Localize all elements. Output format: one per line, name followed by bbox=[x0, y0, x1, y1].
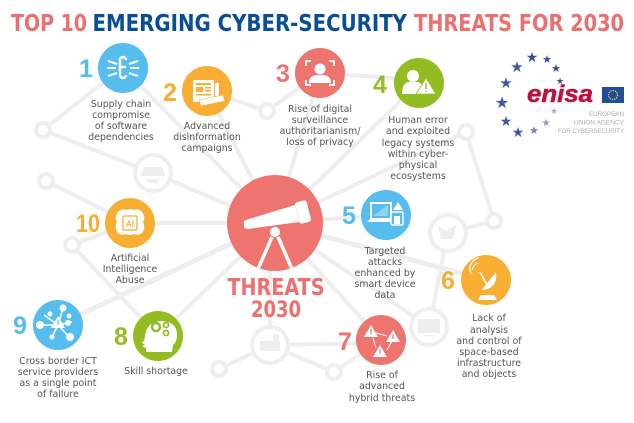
threat 4: human error: Human error bbox=[388, 115, 448, 126]
EU stars: ★ bbox=[495, 93, 509, 112]
EU stars: ★ bbox=[526, 50, 538, 66]
threat 10: AI abuse: Intelligence bbox=[103, 264, 157, 275]
threat 9: cross border bbox=[13, 300, 98, 400]
threat 3: surveillance: authoritarianism/ bbox=[280, 126, 361, 137]
threat 5: smart devices bbox=[342, 190, 416, 301]
threat 3: surveillance: surveillance bbox=[292, 115, 348, 126]
threat 10: AI abuse: Artificial bbox=[111, 253, 149, 264]
threat 9: cross border: service providers bbox=[18, 367, 98, 378]
threat 5: smart devices: Targeted bbox=[364, 246, 405, 257]
title: EMERGING CYBER-SECURITY bbox=[92, 11, 407, 37]
central label bbox=[228, 275, 324, 323]
threat 3: surveillance: loss of privacy bbox=[286, 137, 354, 148]
EU stars: ★ bbox=[556, 77, 564, 87]
threat 10: AI abuse: Abuse bbox=[116, 275, 145, 286]
EU stars: ★ bbox=[512, 125, 524, 141]
ENISA logo: EUROPEAN bbox=[589, 111, 624, 118]
threat 2: disinformation: campaigns bbox=[181, 143, 233, 154]
threat 6: satellite bbox=[441, 255, 522, 380]
threat 1: supply chain: dependencies bbox=[88, 132, 154, 143]
central label: 2030 bbox=[251, 298, 301, 323]
EU stars: ★ bbox=[500, 114, 512, 130]
threat 6: satellite: Lack of bbox=[472, 313, 506, 324]
threat 7: hybrid threats: advanced bbox=[359, 381, 405, 392]
ENISA logo: enisa bbox=[527, 81, 593, 108]
threat 4: human error bbox=[373, 58, 454, 182]
threat 6: satellite: analysis bbox=[470, 325, 508, 336]
threat 2: disinformation: disinformation bbox=[173, 132, 241, 143]
EU stars: ★ bbox=[550, 107, 558, 117]
threat 3: surveillance bbox=[276, 48, 361, 148]
threat 3: surveillance: 3 bbox=[276, 60, 290, 88]
threat 4: human error: physical bbox=[399, 160, 437, 171]
threat 4: human error: legacy systems bbox=[382, 138, 454, 149]
threat 1: supply chain: 1 bbox=[79, 55, 93, 83]
ENISA logo bbox=[495, 50, 625, 141]
EU stars: ★ bbox=[499, 74, 513, 92]
threat 1: supply chain: compromise bbox=[92, 110, 150, 121]
title: TOP 10 bbox=[11, 11, 87, 37]
EU stars: ★ bbox=[542, 53, 552, 66]
threat 5: smart devices: data bbox=[374, 290, 396, 301]
threat 6: satellite: infrastructure bbox=[457, 358, 521, 369]
threat 7: hybrid threats: 7 bbox=[338, 328, 352, 356]
background network bbox=[36, 68, 501, 379]
threat 5: smart devices: 5 bbox=[342, 202, 356, 230]
EU stars: ★ bbox=[551, 62, 561, 75]
central label: THREATS bbox=[228, 275, 324, 301]
EU stars: ★ bbox=[542, 118, 551, 129]
threat 1: supply chain: Supply chain bbox=[91, 99, 151, 110]
threat 5: smart devices: smart device bbox=[354, 279, 416, 290]
ENISA logo: FOR CYBERSECURITY bbox=[558, 128, 625, 135]
threat 3: surveillance: Rise of digital bbox=[288, 104, 352, 115]
threat 7: hybrid threats: Rise of bbox=[366, 370, 399, 381]
threat 8: skill shortage: 8 bbox=[114, 323, 128, 351]
threat 2: disinformation bbox=[163, 66, 241, 154]
threat 8: skill shortage: Skill shortage bbox=[124, 366, 188, 377]
EU stars: ★ bbox=[529, 124, 539, 137]
threat 7: hybrid threats: hybrid threats bbox=[349, 393, 415, 404]
central circle with telescope bbox=[227, 175, 323, 271]
threat 2: disinformation: Advanced bbox=[184, 121, 230, 132]
EU stars: ★ bbox=[510, 58, 524, 76]
threat 9: cross border: of failure bbox=[37, 389, 79, 400]
threat 4: human error: ecosystems bbox=[390, 171, 446, 182]
threat 5: smart devices: enhanced by bbox=[355, 268, 416, 279]
threat 4: human error: within cyber- bbox=[388, 149, 448, 160]
threat 10: AI abuse: 10 bbox=[76, 210, 100, 238]
threat 6: satellite: and control of bbox=[456, 336, 522, 347]
threat 6: satellite: space-based bbox=[459, 347, 519, 358]
threat 5: smart devices: attacks bbox=[368, 257, 402, 268]
threat 4: human error: and exploited bbox=[386, 126, 450, 137]
threat 9: cross border: Cross border ICT bbox=[19, 356, 97, 367]
faded node icons bbox=[141, 167, 456, 351]
threat 10: AI abuse: AI bbox=[126, 220, 134, 228]
threat 8: skill shortage bbox=[114, 311, 188, 377]
threat 2: disinformation: 2 bbox=[163, 79, 177, 107]
EU stars bbox=[495, 50, 564, 141]
threat 1: supply chain: of software bbox=[95, 121, 147, 132]
threat 7: hybrid threats bbox=[338, 315, 415, 404]
threat 9: cross border: 9 bbox=[13, 312, 27, 340]
threat 6: satellite: 6 bbox=[441, 267, 455, 295]
threat 1: supply chain bbox=[79, 43, 154, 143]
threat 9: cross border: as a single point bbox=[20, 378, 97, 389]
ENISA logo: UNION AGENCY bbox=[574, 120, 625, 126]
threat 10: AI abuse bbox=[76, 198, 157, 286]
title bbox=[11, 11, 624, 37]
threat 4: human error: 4 bbox=[373, 71, 387, 99]
threat 6: satellite: and objects bbox=[462, 369, 516, 380]
